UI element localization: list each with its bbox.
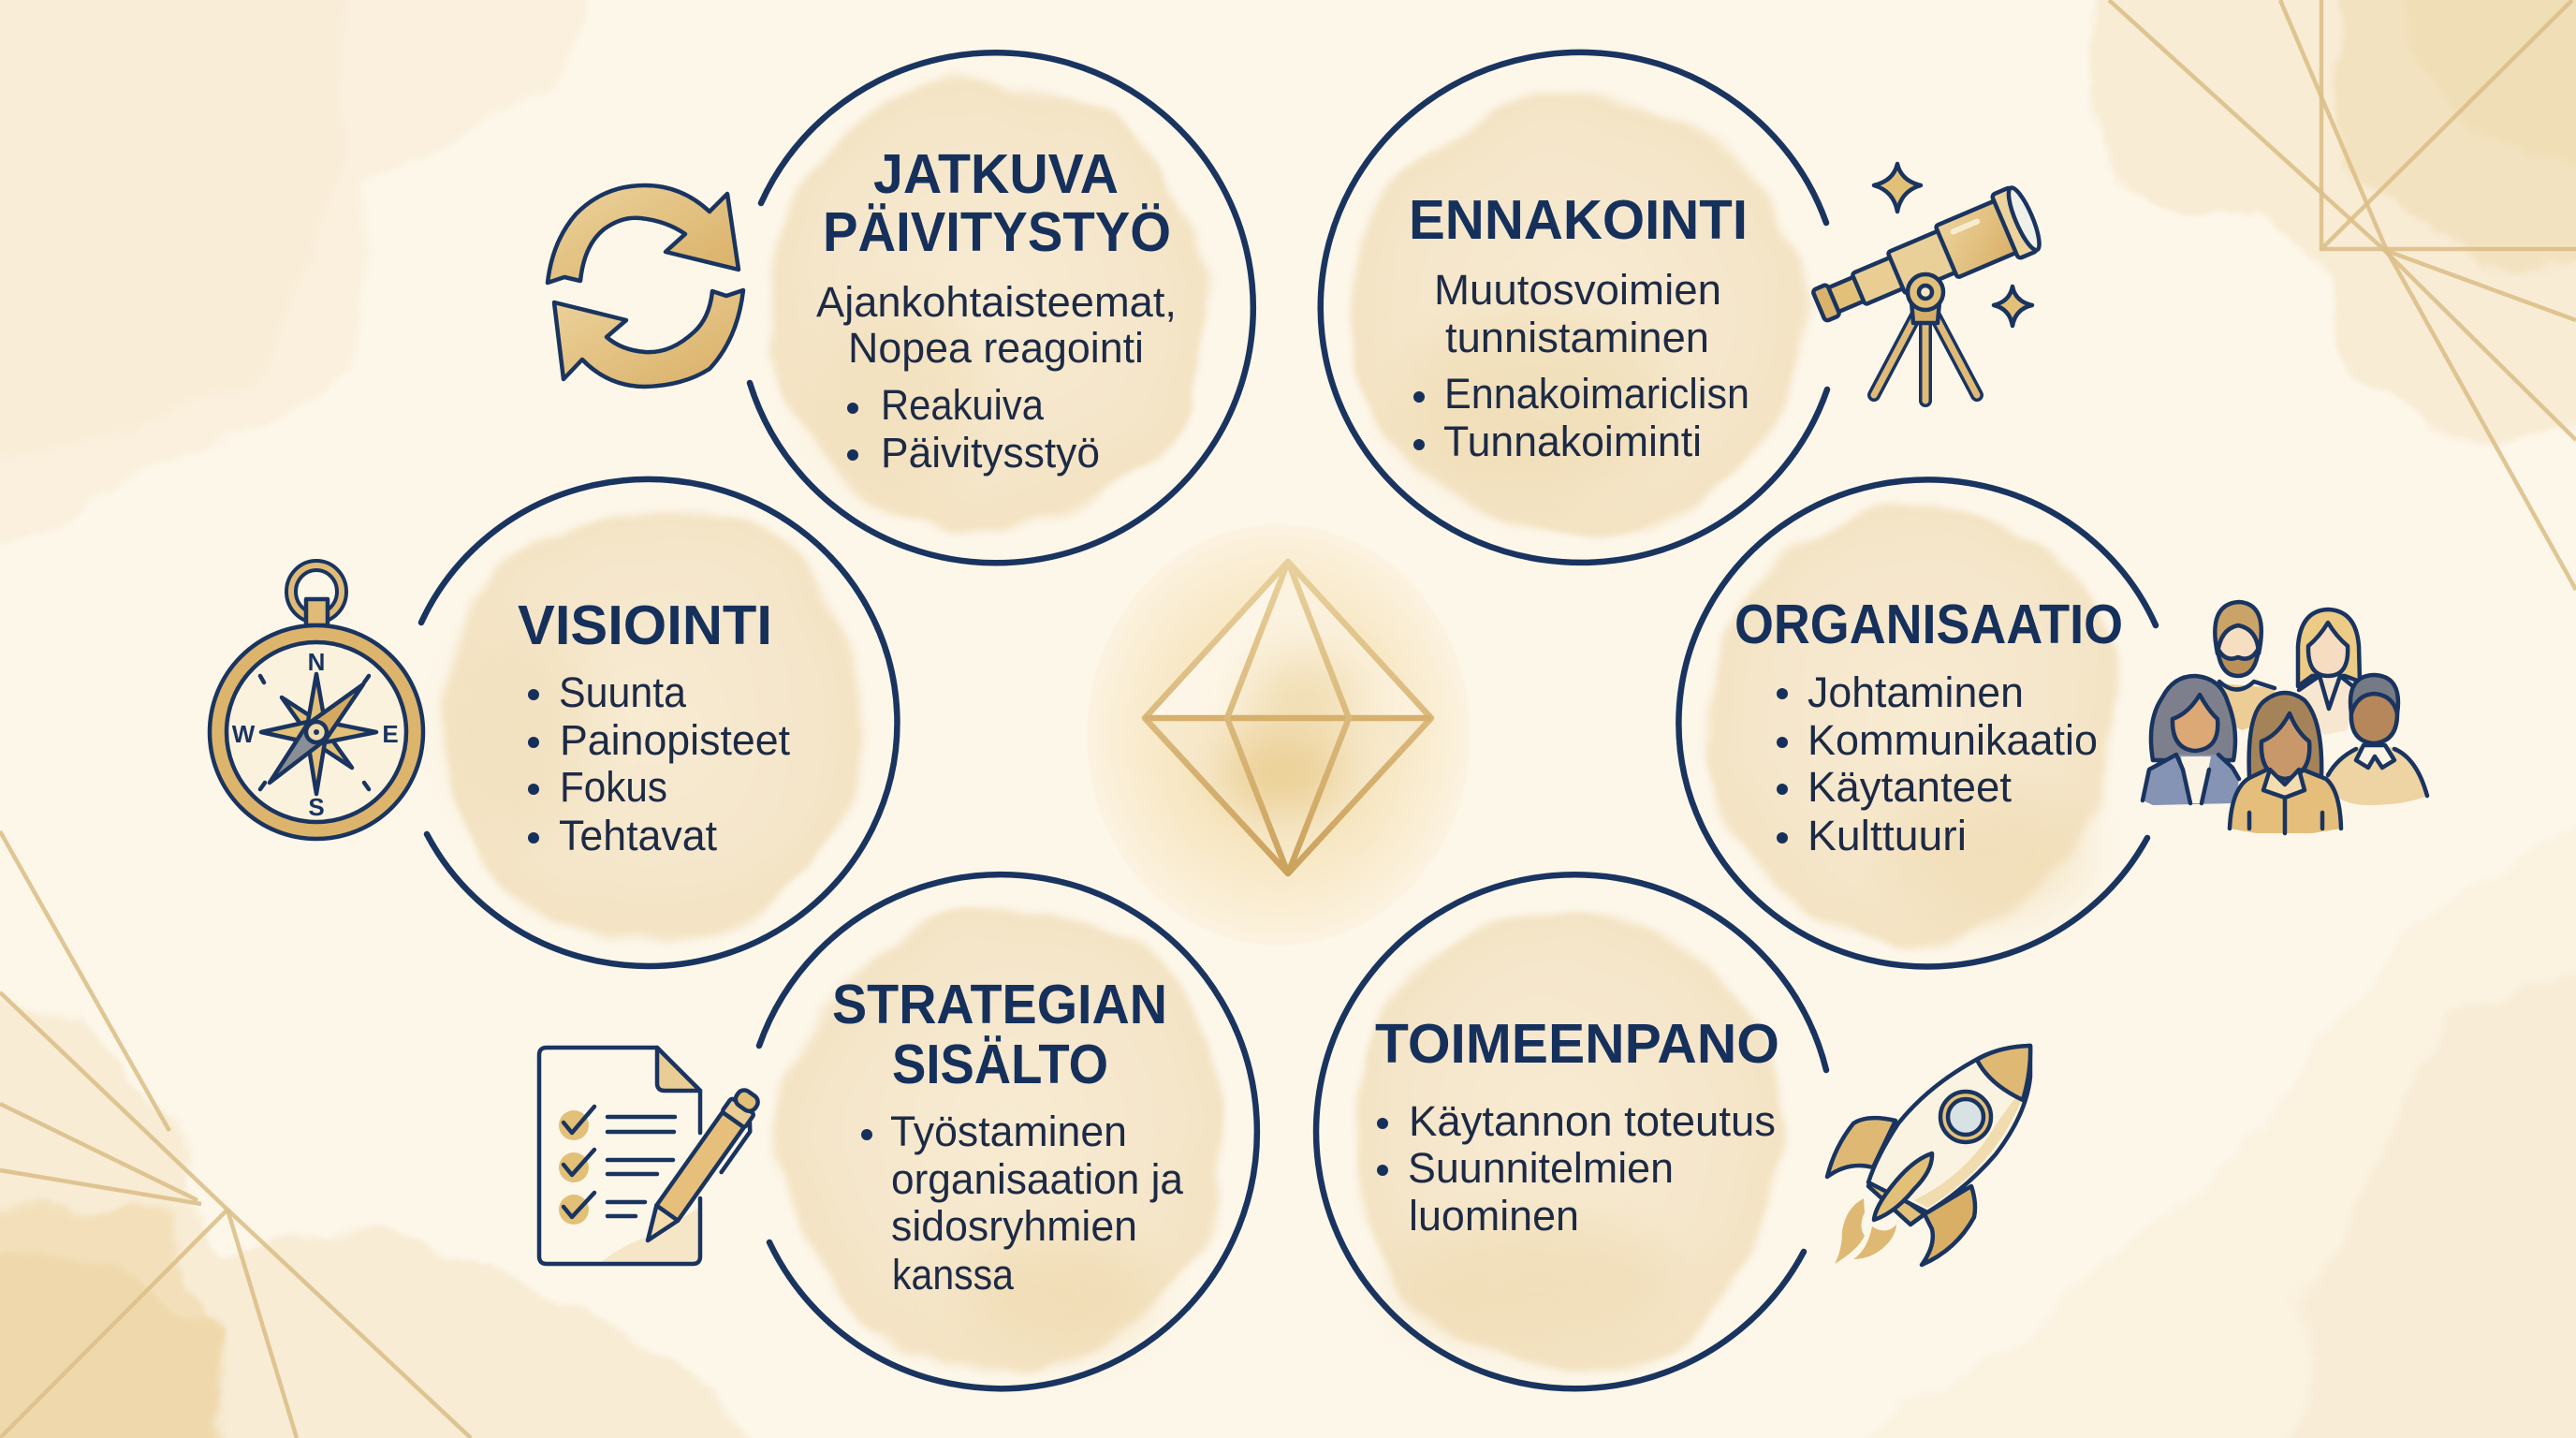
panel: Organisaatio [1678, 479, 2156, 966]
check items [559, 1107, 594, 1225]
panel: Strategian sisältö [759, 874, 1257, 1388]
tick marks [260, 676, 369, 789]
intro text: Ajankohtaisteemat, [816, 278, 1177, 326]
heading: TOIMEENPANO [1375, 1013, 1779, 1075]
watercolor blob [440, 510, 865, 939]
bullet list: Tunnakoiminti [1443, 418, 1702, 465]
heading: ENNAKOINTI [1409, 189, 1748, 251]
case [210, 625, 423, 839]
bullet list: Tehtavat [559, 812, 717, 859]
panel: Toimeenpano [1316, 874, 1826, 1388]
letters [232, 648, 399, 821]
heading: VISIOINTI [518, 594, 772, 656]
geometric gold lines: bottom left [0, 831, 471, 1438]
bullet list [1413, 370, 1749, 465]
watercolor blob [1343, 908, 1783, 1367]
ring [1678, 479, 2156, 966]
bullet list: Reakuiva [881, 381, 1045, 429]
bullet list: Ennakoimariclisn [1444, 370, 1749, 418]
document [539, 1048, 700, 1264]
icon: telescope [1806, 164, 2045, 401]
ring [1321, 52, 1827, 563]
letters: S [308, 793, 325, 821]
bullet list [861, 1108, 1184, 1299]
mount [1908, 274, 1943, 310]
heading: ORGANISAATIO [1734, 594, 2123, 655]
pencil [637, 1086, 768, 1253]
letters: N [308, 648, 325, 676]
intro text: Muutosvoimien [1434, 266, 1721, 314]
diamond facets [1145, 562, 1431, 873]
person: back woman [2298, 609, 2360, 735]
bullet list [528, 668, 790, 859]
emblem glow [1087, 524, 1471, 946]
intro text: Nopea reagointi [848, 324, 1144, 372]
heading [823, 143, 1171, 263]
centre fin [1874, 1153, 1932, 1220]
panel: Jatkuva päivitystyö [750, 52, 1253, 563]
bullet list [847, 381, 1100, 477]
bullet list: sidosryhmien [891, 1202, 1137, 1250]
compass rose [261, 674, 376, 794]
heading: PÄIVITYSTYÖ [823, 201, 1171, 263]
geometric gold lines: top right [2109, 0, 2576, 590]
bullet list: Painopisteet [560, 716, 790, 764]
loop [291, 565, 342, 618]
nozzle [1868, 1177, 1925, 1225]
heading: JATKUVA [873, 143, 1119, 205]
bullet list: Suunnitelmien [1408, 1144, 1674, 1192]
panel: Ennakointi [1321, 52, 1827, 563]
ring [750, 52, 1253, 563]
nose cone [1977, 1046, 2030, 1100]
bullet list: Kulttuuri [1808, 812, 1967, 859]
heading: STRATEGIAN [832, 974, 1167, 1035]
flames [1835, 1198, 1896, 1264]
bullet list: Kommunikaatio [1808, 716, 2098, 764]
watercolor wash: top right corner [2033, 0, 2576, 440]
watercolor blob [1350, 99, 1805, 534]
icon: checklist and pencil [539, 1048, 768, 1264]
intro text [1434, 266, 1721, 361]
bullet list: Johtaminen [1808, 668, 2024, 716]
left fin [1827, 1118, 1895, 1177]
tube [1806, 183, 2045, 338]
icon: team of people [2143, 602, 2427, 833]
watercolor wash: top left corner [0, 0, 608, 571]
ring [1316, 874, 1826, 1388]
body shading [1914, 1097, 2022, 1208]
star small [1994, 286, 2032, 326]
icon: compass [210, 565, 423, 839]
person: right man [2328, 675, 2427, 805]
ring [421, 479, 897, 966]
bullet list: Suunta [559, 668, 687, 716]
bullet list: organisaation ja [891, 1155, 1184, 1203]
watercolor blob [783, 906, 1225, 1367]
bullet list: Päivitysstyö [881, 429, 1100, 477]
body [1868, 1046, 2030, 1212]
intro text [816, 278, 1177, 372]
bullet list: Käytannon toteutus [1409, 1097, 1776, 1145]
person: back man [2215, 602, 2275, 730]
bullet list: kanssa [892, 1251, 1015, 1299]
tripod [1874, 301, 1977, 401]
letters: W [232, 720, 256, 748]
needle [270, 684, 363, 783]
icon: refresh arrows [548, 185, 743, 387]
bullet list: luominen [1409, 1192, 1579, 1240]
star large [1874, 164, 1921, 212]
text lines [607, 1117, 675, 1216]
panel: Visiointi [421, 479, 897, 966]
watercolor blob [1706, 506, 2122, 942]
intro text: tunnistaminen [1445, 314, 1709, 361]
ring [759, 874, 1257, 1388]
bullet list: Työstaminen [890, 1108, 1127, 1155]
bullet list: Käytanteet [1808, 763, 2012, 811]
watercolor blob [766, 81, 1209, 533]
watercolor wash: bottom left corner [0, 927, 805, 1438]
window [1940, 1092, 1991, 1142]
heading [832, 974, 1167, 1095]
icon: rocket [1827, 1046, 2030, 1265]
bullet list [1377, 1097, 1776, 1240]
right fin [1922, 1186, 1975, 1265]
bullet list: Fokus [560, 763, 667, 811]
person: front woman [2230, 693, 2341, 833]
letters: E [382, 720, 399, 748]
diamond outline [1145, 562, 1431, 873]
heading: SISÄLTO [892, 1034, 1108, 1095]
central diamond emblem [1087, 524, 1471, 946]
person: left woman [2143, 676, 2239, 805]
watercolor wash: bottom right corner [1722, 768, 2576, 1438]
bullet list [1777, 668, 2098, 859]
